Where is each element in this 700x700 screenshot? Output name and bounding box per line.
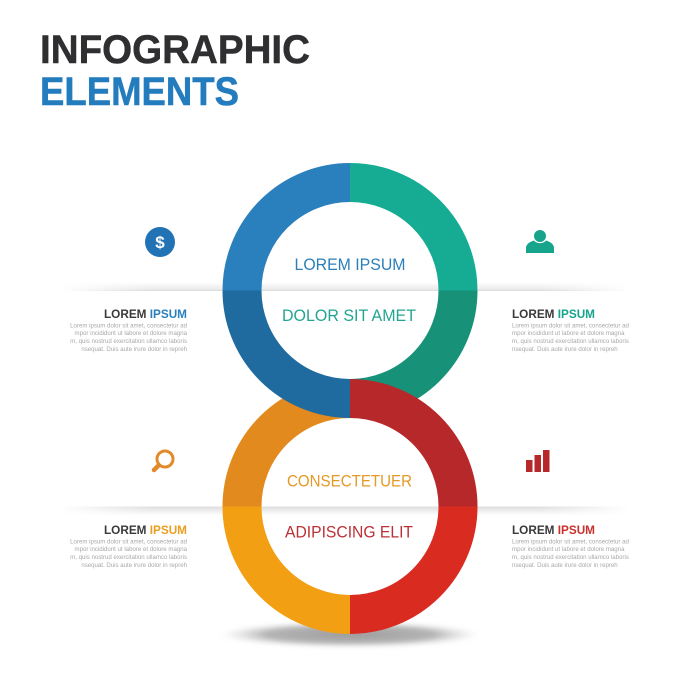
center label: dolor sit amet: DOLOR SIT AMET <box>282 306 416 325</box>
center label: lorem ipsum: LOREM IPSUM <box>294 255 406 274</box>
icon: bars <box>526 450 550 472</box>
icon: person <box>526 230 554 253</box>
icon: dollar: $ <box>155 233 165 252</box>
text block: upper right: mpor incididunt ut labore et dolore magna <box>512 330 625 337</box>
text block: lower left: LOREM IPSUM <box>104 523 187 537</box>
title: INFOGRAPHIC <box>40 28 310 72</box>
text block: lower left: Lorem ipsum dolor sit amet, consectetur ad <box>70 538 187 546</box>
text block: upper right <box>512 307 629 353</box>
lower ring: red lower quarter <box>350 506 478 634</box>
text block: lower left: nsequat. Duis aute irure dolor in repreh <box>81 562 187 569</box>
text block: upper right: Lorem ipsum dolor sit amet, consectetur ad <box>512 322 629 330</box>
text block: upper right: nsequat. Duis aute irure dolor in repreh <box>512 346 618 353</box>
text block: lower left <box>70 523 188 569</box>
text block: lower left: mpor incididunt ut labore et dolore magna <box>75 546 188 553</box>
text block: upper right: m, quis nostrud exercitation ullamco laboris <box>512 338 629 345</box>
text block: upper left <box>70 307 188 353</box>
text block: upper left: Lorem ipsum dolor sit amet, consectetur ad <box>70 322 187 330</box>
shadow band: upper <box>60 280 630 293</box>
text block: upper left: m, quis nostrud exercitation ullamco laboris <box>70 338 187 345</box>
upper ring <box>242 182 458 398</box>
text block: lower right: m, quis nostrud exercitation ullamco laboris <box>512 554 629 561</box>
text block: lower right: LOREM IPSUM <box>512 523 595 537</box>
text block: lower right: Lorem ipsum dolor sit amet, consectetur ad <box>512 538 629 546</box>
title: ELEMENTS <box>40 70 239 114</box>
icon: dollar <box>145 227 175 257</box>
icon: magnifier <box>154 451 173 470</box>
lower ring: red upper quarter over teal <box>350 379 478 506</box>
ground shadow <box>220 622 480 648</box>
text block: lower left: m, quis nostrud exercitation ullamco laboris <box>70 554 187 561</box>
text block: upper left: LOREM IPSUM <box>104 307 187 321</box>
text block: lower right <box>512 523 629 569</box>
lower ring: orange half <box>222 398 350 634</box>
title <box>40 28 310 114</box>
text block: lower right: mpor incididunt ut labore et dolore magna <box>512 546 625 553</box>
center label: adipiscing elit: ADIPISCING ELIT <box>285 522 413 542</box>
shadow band: lower <box>60 504 630 518</box>
text block: upper left: nsequat. Duis aute irure dolor in repreh <box>81 346 187 353</box>
text block: lower right: nsequat. Duis aute irure dolor in repreh <box>512 562 618 569</box>
center label: consectetuer: CONSECTETUER <box>287 472 412 490</box>
text block: upper right: LOREM IPSUM <box>512 307 595 321</box>
text block: upper left: mpor incididunt ut labore et dolore magna <box>75 330 188 337</box>
